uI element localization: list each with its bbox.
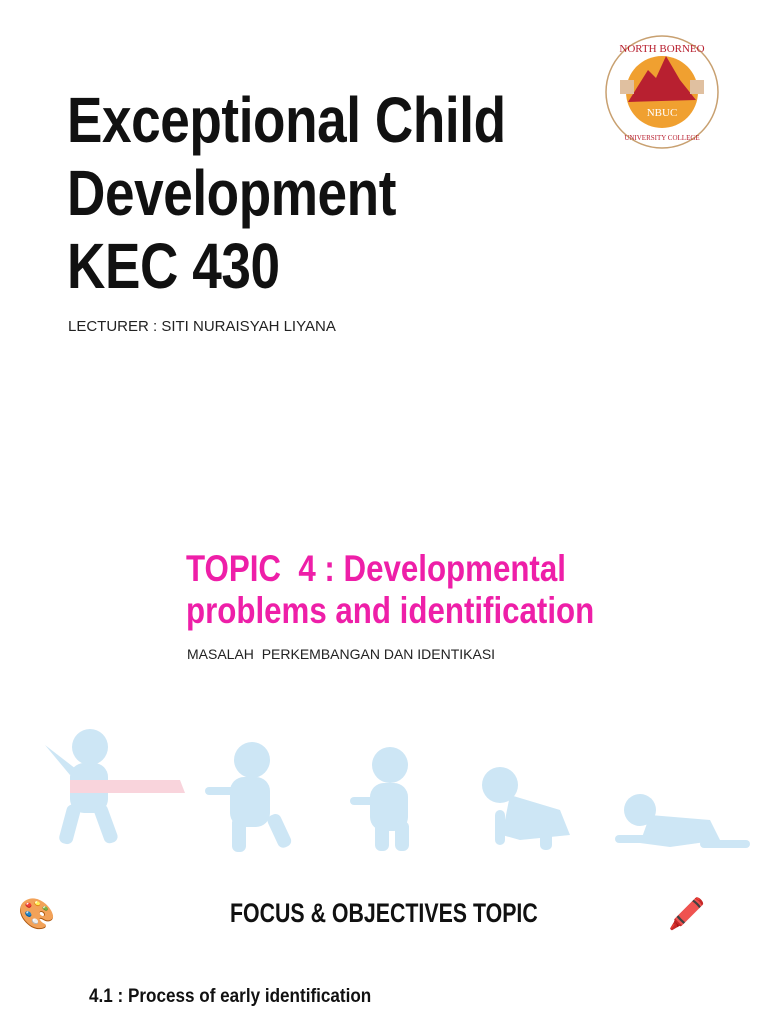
subtitle: MASALAH PERKEMBANGAN DAN IDENTIKASI: [187, 646, 495, 662]
icon: palette right: 🖍️: [668, 898, 705, 931]
silhouettes: [45, 729, 750, 852]
lecturer: LECTURER : SITI NURAISYAH LIYANA: [68, 318, 336, 335]
icon: palette left: 🎨: [18, 898, 55, 931]
logo: UNIVERSITY COLLEGE: [624, 134, 700, 142]
logo: NORTH BORNEO: [619, 43, 705, 55]
logo: NBUC: [647, 107, 677, 119]
topic heading: problems and identification: [186, 590, 594, 631]
title: Development: [67, 157, 396, 229]
title: KEC 430: [67, 230, 280, 302]
focus heading: FOCUS & OBJECTIVES TOPIC: [230, 898, 538, 928]
objective 4.1: 4.1 : Process of early identification: [89, 986, 371, 1007]
topic heading: TOPIC 4 : Developmental: [186, 548, 566, 589]
title: Exceptional Child: [67, 84, 506, 156]
title: [67, 84, 506, 302]
logo: [605, 35, 719, 149]
topic heading: [186, 548, 594, 631]
